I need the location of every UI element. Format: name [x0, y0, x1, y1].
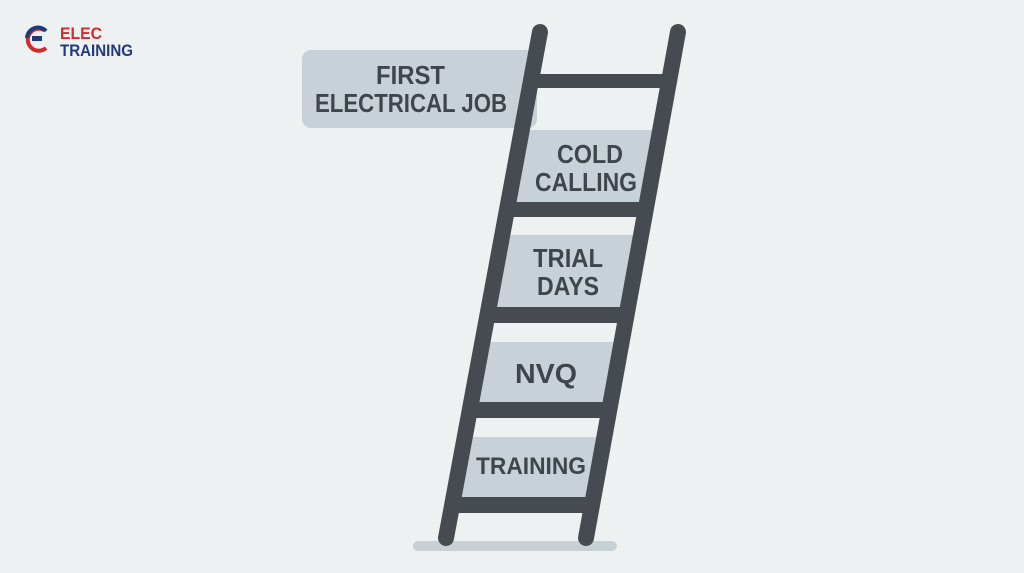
panel: nvq: NVQ: [515, 358, 577, 389]
panel: cold calling: CALLING: [535, 167, 637, 197]
panel: cold calling: [503, 130, 660, 202]
panel: trial days: DAYS: [537, 271, 599, 301]
label: first electrical job: [302, 50, 537, 128]
logo: TRAINING: [60, 41, 133, 60]
panel: cold calling: COLD: [557, 139, 623, 169]
logo: ELEC: [60, 24, 102, 43]
panel: training: TRAINING: [476, 453, 586, 480]
label: first electrical job: FIRST: [376, 60, 445, 90]
panel: trial days: [483, 235, 640, 308]
logo: [27, 24, 133, 60]
ladder: [446, 32, 678, 538]
panel: nvq: [467, 342, 622, 402]
panel: training: [450, 437, 605, 497]
floor shadow: [413, 541, 617, 551]
label: first electrical job: ELECTRICAL JOB: [315, 88, 507, 118]
panel: trial days: TRIAL: [533, 243, 603, 273]
